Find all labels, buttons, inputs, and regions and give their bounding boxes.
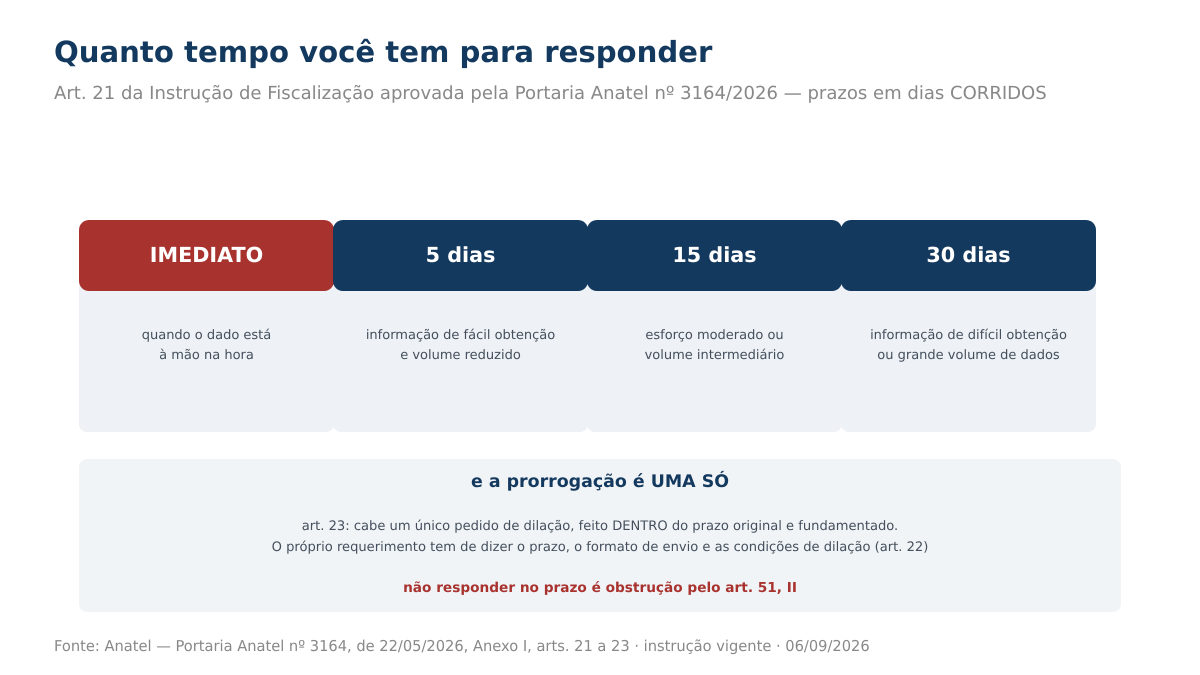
text: 15 dias description: volume intermediário — [645, 348, 784, 363]
text: 5 dias description: informação de fácil obtenção — [366, 328, 555, 343]
text: art. 23 explanation — [272, 518, 928, 554]
heading: imediato — [79, 220, 334, 291]
text: art. 23 explanation: art. 23: cabe um único pedido de dilação, feito DENTRO do prazo original e fundamentado. — [302, 518, 898, 534]
heading: 30 dias — [841, 220, 1096, 291]
title: Quanto tempo você tem para responder — [54, 35, 712, 69]
panel: imediato — [79, 220, 334, 432]
text: 15 dias description: esforço moderado ou — [645, 328, 784, 343]
heading: 15 dias: 15 dias — [672, 243, 757, 267]
heading: 5 dias — [333, 220, 588, 291]
text: 5 dias description: e volume reduzido — [400, 348, 521, 363]
panel: 15 dias — [588, 220, 842, 432]
heading: 5 dias: 5 dias — [426, 243, 495, 267]
heading: 30 dias: 30 dias — [926, 243, 1011, 267]
panel: prorrogação — [79, 459, 1121, 612]
text: art. 23 explanation: O próprio requerimento tem de dizer o prazo, o formato de envio e as condições de dilação (art. 22) — [272, 540, 928, 554]
footer source: Fonte: Anatel — Portaria Anatel nº 3164, de 22/05/2026, Anexo I, arts. 21 a 23 · instrução vigente · 06/09/2026 — [54, 637, 870, 655]
heading: prorrogação: e a prorrogação é UMA SÓ — [471, 472, 729, 492]
text: imediato description: quando o dado está — [142, 328, 271, 343]
panel: 30 dias — [842, 220, 1096, 432]
subtitle: Art. 21 da Instrução de Fiscalização aprovada pela Portaria Anatel nº 3164/2026 — prazos em dias CORRIDOS — [54, 82, 1047, 104]
text: 30 dias description: informação de difícil obtenção — [870, 328, 1067, 343]
text: 30 dias description: ou grande volume de dados — [877, 348, 1060, 363]
text: 15 dias description — [645, 328, 784, 363]
panel: 5 dias — [333, 220, 588, 432]
callout: obstrução warning: não responder no prazo é obstrução pelo art. 51, II — [403, 580, 797, 596]
heading: imediato: IMEDIATO — [150, 243, 263, 267]
text: imediato description — [142, 328, 271, 363]
text: 30 dias description — [870, 328, 1067, 363]
text: 5 dias description — [366, 328, 555, 363]
heading: 15 dias — [587, 220, 842, 291]
text: imediato description: à mão na hora — [159, 348, 254, 363]
